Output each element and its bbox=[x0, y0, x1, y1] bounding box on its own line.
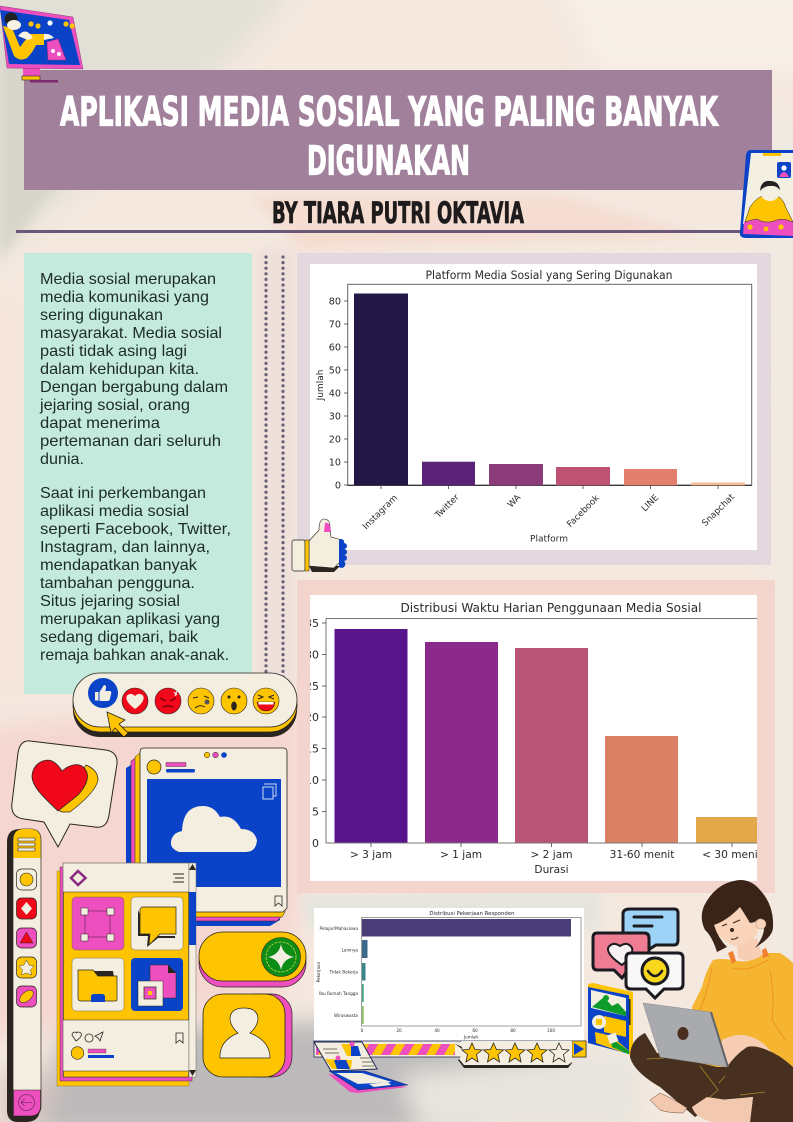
paragraph one: dalam kehidupan kita. bbox=[40, 361, 199, 378]
bar chart: duration: 30 bbox=[305, 648, 319, 662]
paragraph two: tambahan pengguna. bbox=[40, 575, 195, 592]
icon: reaction bar bbox=[73, 673, 297, 737]
face bbox=[713, 900, 761, 946]
bar chart: platform: Facebook bbox=[565, 493, 602, 530]
bar chart: duration: 10 bbox=[305, 774, 319, 787]
paragraph one: jejaring sosial, orang bbox=[39, 397, 190, 414]
paragraph one: dunia. bbox=[40, 451, 84, 468]
author byline: BY TIARA PUTRI OKTAVIA bbox=[272, 196, 524, 230]
bar chart: platform: Platform bbox=[530, 534, 568, 544]
icon: open laptop bbox=[314, 1042, 408, 1093]
header rule bbox=[16, 230, 744, 233]
bar chart: platform: WA bbox=[506, 493, 523, 510]
star rating bbox=[455, 1041, 572, 1068]
hands and lap bbox=[722, 1035, 793, 1075]
bar chart: duration: 0 bbox=[312, 837, 319, 850]
paragraph one: sering digunakan bbox=[40, 307, 163, 324]
paragraph one: pasti tidak asing lagi bbox=[40, 343, 187, 360]
title: DIGUNAKAN bbox=[307, 138, 470, 184]
icon: chat bubbles bbox=[593, 909, 683, 998]
bar chart: platform: Snapchat bbox=[700, 492, 737, 529]
bar chart: duration: 20 bbox=[305, 711, 319, 724]
paragraph two: remaja bahkan anak-anak. bbox=[40, 647, 229, 664]
paragraph one: media komunikasi yang bbox=[40, 289, 209, 306]
hair bbox=[702, 880, 773, 952]
icon: toggle switch bbox=[199, 932, 306, 987]
bar chart: occupation: 80 bbox=[510, 1028, 516, 1033]
bar chart: occupation: 100 bbox=[547, 1028, 555, 1033]
bar chart: platform: Instagram bbox=[361, 493, 400, 532]
paragraph two bbox=[40, 485, 231, 664]
bar chart: occupation: Lainnya bbox=[342, 948, 358, 952]
paragraph one: Dengan bergabung dalam bbox=[40, 379, 228, 396]
icon: photo post card bbox=[588, 983, 633, 1055]
bar chart: platform: 0 bbox=[335, 480, 341, 492]
bar chart: duration: 31-60 menit bbox=[610, 849, 674, 861]
laptop bbox=[643, 1003, 727, 1067]
bar chart: platform: Twitter bbox=[433, 492, 462, 521]
paragraph two: seperti Facebook, Twitter, bbox=[40, 521, 231, 538]
bar chart: duration: > 2 jam bbox=[530, 849, 573, 861]
bar chart: duration: > 1 jam bbox=[440, 849, 482, 861]
chart title: duration: Distribusi Waktu Harian Penggunaan Media Sosial bbox=[400, 601, 702, 616]
title bbox=[60, 90, 719, 184]
orange straps bbox=[728, 948, 769, 964]
illustration: woman with laptop bbox=[630, 880, 793, 1122]
icon: heart speech bubble bbox=[12, 741, 117, 847]
icon: profile tile bbox=[203, 994, 292, 1077]
icon: left sidebar bbox=[7, 829, 41, 1122]
bar chart: occupation bbox=[316, 918, 581, 1040]
reaction: wow bbox=[221, 688, 247, 714]
bar chart: duration bbox=[305, 617, 762, 876]
bar chart: duration: 25 bbox=[305, 680, 319, 693]
bar chart: platform: 60 bbox=[329, 342, 341, 354]
paragraph two: Saat ini perkembangan bbox=[40, 485, 206, 502]
icon: monitor with person bbox=[0, 6, 83, 82]
bar chart: duration: 5 bbox=[312, 806, 319, 818]
bar chart: occupation: 0 bbox=[361, 1028, 364, 1033]
bar chart: occupation: Pelajar/Mahasiswa bbox=[320, 926, 358, 931]
icon: app grid window bbox=[57, 863, 196, 1086]
bar chart: occupation: Pekerjaan bbox=[316, 961, 321, 982]
bar chart: duration: 35 bbox=[305, 617, 319, 630]
reaction: angry bbox=[155, 688, 181, 714]
bar chart: occupation: Tidak Bekerja bbox=[329, 970, 358, 974]
title banner bbox=[24, 70, 772, 190]
paragraph two: Instagram, dan lainnya, bbox=[40, 539, 210, 556]
paragraph one: masyarakat. Media sosial bbox=[40, 325, 222, 342]
paragraph one: pertemanan dari seluruh bbox=[40, 433, 221, 450]
bar chart: platform: 40 bbox=[329, 388, 341, 400]
bar chart: duration: > 3 jam bbox=[350, 849, 392, 861]
bar chart: platform: 70 bbox=[329, 320, 341, 330]
panel: platform chart bbox=[297, 253, 771, 565]
paragraph two: Situs jejaring sosial bbox=[40, 593, 180, 610]
paragraph two: sedang digemari, baik bbox=[40, 629, 199, 646]
icon: social post window bbox=[126, 748, 287, 926]
paragraph one bbox=[39, 271, 228, 468]
bar chart: occupation: Jumlah bbox=[463, 1034, 479, 1040]
sweater bbox=[692, 953, 793, 1075]
bar chart: occupation: Wiraswasta bbox=[334, 1013, 358, 1018]
bar chart: duration: Durasi bbox=[534, 864, 569, 876]
bar chart: duration: 15 bbox=[305, 742, 319, 756]
paragraph one: Media sosial merupakan bbox=[40, 271, 216, 288]
bar chart: duration: < 30 menit bbox=[702, 849, 762, 861]
neck bbox=[737, 938, 762, 960]
cursor arrow bbox=[107, 712, 128, 737]
panel: daily duration chart bbox=[297, 580, 775, 893]
bar chart: occupation: 40 bbox=[434, 1028, 440, 1033]
reaction: sad bbox=[188, 688, 214, 714]
bar chart: occupation: 60 bbox=[472, 1028, 478, 1033]
bar chart: platform: 80 bbox=[329, 296, 341, 308]
paragraph two: aplikasi media sosial bbox=[40, 503, 189, 520]
bar chart: occupation: Ibu Rumah Tangga bbox=[319, 991, 358, 996]
bar chart: platform: 50 bbox=[329, 366, 341, 376]
bar chart: occupation: 20 bbox=[396, 1028, 402, 1033]
bar chart: platform: Jumlah bbox=[316, 370, 326, 401]
panel: introduction text bbox=[24, 253, 252, 694]
chart title: platform: Platform Media Sosial yang Sering Digunakan bbox=[426, 268, 672, 282]
icon: thumbs up bbox=[292, 519, 347, 572]
reaction: like bbox=[88, 678, 118, 708]
paragraph two: mendapatkan banyak bbox=[40, 557, 198, 574]
legs bbox=[630, 1033, 793, 1122]
bar chart: platform: 20 bbox=[329, 434, 341, 446]
reaction: love bbox=[122, 688, 148, 714]
bar chart: platform: LINE bbox=[640, 493, 661, 514]
reaction: laugh bbox=[253, 688, 279, 714]
bar chart: platform: 30 bbox=[329, 412, 341, 422]
paragraph one: dapat menerima bbox=[40, 415, 160, 432]
panel: occupation chart bbox=[314, 908, 584, 1041]
feet bbox=[650, 1093, 687, 1113]
icon: phone video call bbox=[740, 150, 793, 238]
bar chart: platform: 10 bbox=[329, 458, 341, 468]
paragraph two: merupakan aplikasi yang bbox=[40, 611, 220, 628]
progress strip bbox=[314, 1041, 586, 1057]
bar chart: platform bbox=[316, 284, 752, 544]
chart title: occupation: Distribusi Pekerjaan Responden bbox=[429, 911, 515, 917]
